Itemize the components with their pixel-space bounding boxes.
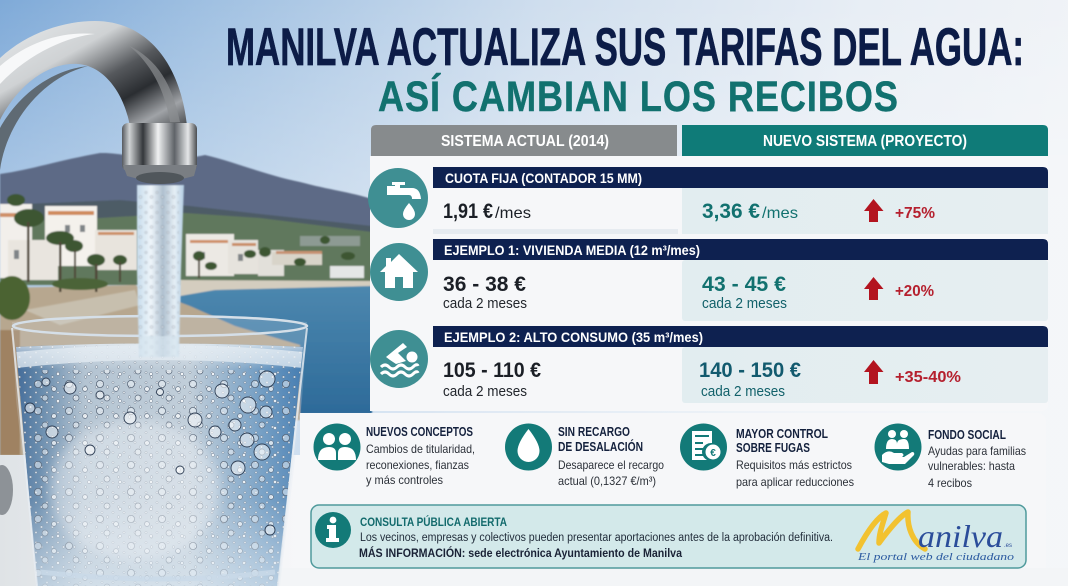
new value — [702, 200, 798, 223]
arrow and increase — [864, 360, 961, 386]
current value — [443, 359, 541, 400]
feature: nuevos conceptos — [314, 424, 475, 487]
column header: nuevo sistema — [682, 125, 1048, 156]
heading bar: CUOTA FIJA (CONTADOR 15 MM) — [445, 170, 642, 186]
light cell backgrounds — [433, 188, 1048, 403]
new value: 43 - 45 € — [702, 273, 786, 296]
feature: sin recargo de desalación: actual (0,1327 €/m³) — [558, 474, 656, 488]
feature: nuevos conceptos: reconexiones, fianzas — [366, 458, 469, 472]
new value: 140 - 150 € — [699, 359, 801, 382]
new value: cada 2 meses — [702, 296, 787, 312]
icon: house — [370, 243, 428, 301]
icon: hand holding family — [874, 424, 922, 470]
current value — [443, 200, 531, 223]
row: ejemplo 2 — [370, 326, 1048, 400]
glass rim — [13, 316, 307, 336]
feature: fondo social: 4 recibos — [928, 476, 972, 490]
current value: cada 2 meses — [443, 296, 527, 312]
hills with vegetation — [0, 213, 372, 285]
current value: 1,91 € — [443, 200, 493, 223]
white fade at bottom — [280, 568, 1068, 586]
row: cuota fija — [368, 167, 1048, 228]
column header: sistema actual: SISTEMA ACTUAL (2014) — [441, 133, 609, 150]
lower counter — [0, 455, 300, 586]
icon: swimmer — [370, 330, 428, 388]
heading bar — [433, 167, 1048, 188]
feature: fondo social: vulnerables: hasta — [928, 459, 1015, 473]
logo: Manilva: El portal web del ciudadano — [857, 552, 1014, 563]
feature: nuevos conceptos: y más controles — [366, 473, 443, 487]
callout: consulta pública abierta: Los vecinos, empresas y colectivos pueden presentar aportaciones antes de la aprobación definitiva. — [360, 532, 833, 544]
feature: sin recargo de desalación: SIN RECARGO — [558, 425, 630, 439]
column header: nuevo sistema: NUEVO SISTEMA (PROYECTO) — [763, 133, 967, 150]
logo: Manilva: .es — [1004, 543, 1012, 549]
larger bubbles — [25, 371, 275, 535]
logo: Manilva: anilva — [918, 518, 1003, 554]
feature: mayor control sobre fugas: SOBRE FUGAS — [736, 441, 810, 455]
arrow and increase: +75% — [895, 205, 935, 222]
new value — [699, 359, 801, 400]
current value: /mes — [495, 205, 531, 222]
heading bar: EJEMPLO 2: ALTO CONSUMO (35 m³/mes) — [444, 329, 703, 345]
title — [226, 18, 1024, 121]
sea — [180, 286, 372, 414]
arrow and increase — [864, 199, 935, 222]
feature: mayor control sobre fugas: Requisitos más estrictos — [736, 458, 852, 472]
palm trees — [0, 194, 355, 320]
feature: sin recargo de desalación: DE DESALACIÓN — [558, 439, 643, 454]
right lower panel background — [300, 413, 1046, 586]
callout: consulta pública abierta — [311, 505, 1026, 568]
new value — [702, 273, 787, 312]
arrow and increase — [864, 277, 934, 300]
arrow and increase: +35-40% — [895, 369, 961, 386]
new value: cada 2 meses — [701, 384, 785, 400]
feature: mayor control sobre fugas: para aplicar reducciones — [736, 475, 854, 489]
icon: people — [314, 424, 360, 470]
feature: sin recargo de desalación: Desaparece el recargo — [558, 458, 664, 472]
beach and rocks — [0, 285, 300, 460]
mountains — [0, 153, 372, 240]
photo: water stream — [137, 185, 184, 357]
sink tap ball — [0, 465, 13, 515]
photo: glass of water with bubbles — [10, 315, 310, 586]
new value: 3,36 € — [702, 200, 760, 223]
town buildings — [0, 204, 364, 280]
heading bar — [433, 239, 1048, 260]
current value — [443, 273, 527, 312]
heading bar: EJEMPLO 1: VIVIENDA MEDIA (12 m³/mes) — [444, 242, 700, 258]
column header: sistema actual — [371, 125, 677, 156]
callout: consulta pública abierta: MÁS INFORMACIÓN: sede electrónica Ayuntamiento de Manilva — [359, 547, 683, 560]
logo: Manilva — [857, 512, 1014, 563]
arrow and increase: +20% — [895, 283, 934, 300]
feature: sin recargo de desalación — [505, 424, 664, 488]
title line 2: ASÍ CAMBIAN LOS RECIBOS — [378, 73, 898, 121]
photo: chrome faucet — [0, 21, 197, 515]
promenade — [180, 280, 372, 296]
heading bar — [433, 326, 1048, 347]
current value: cada 2 meses — [443, 384, 527, 400]
feature: nuevos conceptos: NUEVOS CONCEPTOS — [366, 425, 473, 439]
icon: water drop — [505, 424, 552, 470]
feature: mayor control sobre fugas — [680, 424, 854, 489]
icon: tap — [368, 168, 428, 228]
current value: 36 - 38 € — [443, 273, 526, 296]
current value: 105 - 110 € — [443, 359, 541, 382]
feature: nuevos conceptos: Cambios de titularidad, — [366, 442, 475, 456]
icon: document with euro coin — [680, 424, 727, 470]
callout: consulta pública abierta: CONSULTA PÚBLICA ABIERTA — [360, 514, 507, 529]
icon: document with euro coin: € — [710, 448, 716, 459]
feature: mayor control sobre fugas: MAYOR CONTROL — [736, 427, 828, 441]
icon: info — [315, 512, 351, 548]
new value: /mes — [762, 205, 798, 222]
feature: fondo social: FONDO SOCIAL — [928, 428, 1006, 442]
row: ejemplo 1 — [370, 239, 1048, 312]
comparison table panel — [368, 125, 1048, 411]
feature: fondo social — [874, 424, 1026, 490]
feature: fondo social: Ayudas para familias — [928, 444, 1026, 458]
photo: coastal landscape — [0, 153, 372, 460]
